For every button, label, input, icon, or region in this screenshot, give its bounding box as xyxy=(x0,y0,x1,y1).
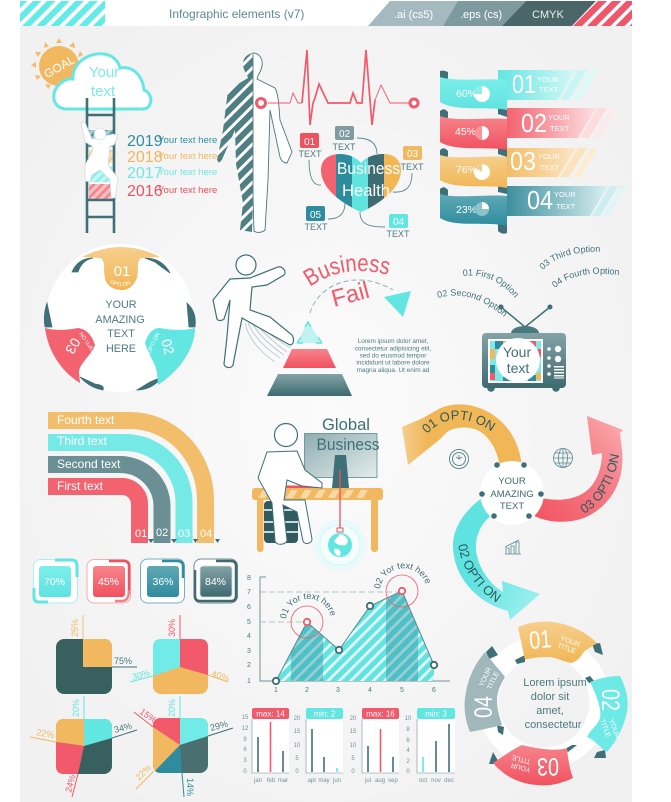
chart oct-dec: 8 xyxy=(406,727,410,733)
ribbon 03 xyxy=(440,146,598,194)
goal cloud and ladder xyxy=(31,38,217,233)
curved callouts: 02 Yor text here xyxy=(374,563,430,588)
ribbon 04: 23% xyxy=(456,204,477,216)
line xyxy=(276,591,434,681)
lorem text: Lorem ipsum dolor amet, xyxy=(358,338,429,345)
timeline years: 2016 xyxy=(127,183,163,200)
chart jul-sep xyxy=(350,708,399,784)
cyan arrow xyxy=(453,499,540,620)
area xyxy=(276,591,434,681)
tile 70: 70% xyxy=(44,576,65,588)
segment 01 orange: 01 xyxy=(114,263,130,280)
segment 01 orange: OPTI ON xyxy=(110,280,130,286)
label 01 xyxy=(298,133,322,159)
segment 04 xyxy=(465,652,505,732)
option labels xyxy=(437,245,619,317)
lorem text: consectetur adipisicing elit, xyxy=(355,346,431,352)
band labels: 02 xyxy=(156,527,168,539)
chart oct-dec: min: 3 xyxy=(425,710,447,718)
chart jul-sep: 15 xyxy=(350,729,357,735)
center text: TEXT xyxy=(107,328,135,340)
header bar xyxy=(20,1,632,26)
chart jul-sep: 5 xyxy=(351,756,355,762)
axis labels: 8 xyxy=(247,575,251,582)
ribbon 03: 76% xyxy=(456,164,477,176)
line chart xyxy=(247,563,450,694)
chart oct-dec: 0 xyxy=(406,769,410,775)
ribbon 02: YOUR xyxy=(548,113,570,122)
header red stripes xyxy=(572,1,632,26)
band first xyxy=(48,486,140,543)
band labels: 03 xyxy=(178,528,190,540)
square pie 1 xyxy=(56,615,137,694)
dashed trajectory xyxy=(310,280,393,313)
white disc xyxy=(46,244,194,392)
timeline years: Your text here xyxy=(158,185,217,196)
tile 36 xyxy=(140,559,184,603)
segment 03: YOUR xyxy=(510,761,532,773)
tv body: text xyxy=(507,360,529,376)
timeline years: 2019 xyxy=(127,133,163,150)
label 05 xyxy=(304,206,328,232)
ribbon 02 xyxy=(440,108,617,157)
segment 02 cyan xyxy=(145,328,195,385)
band labels xyxy=(57,413,212,540)
tile 45 xyxy=(87,560,130,603)
tab: eps: .eps (cs) xyxy=(460,9,502,21)
globe xyxy=(314,470,366,571)
segment 03 red xyxy=(45,328,97,383)
center text: consectetur xyxy=(525,719,582,731)
segment 01 orange xyxy=(82,247,160,290)
human body left striped xyxy=(217,53,253,232)
ribbon 01: TEXT xyxy=(539,85,559,94)
band labels: First text xyxy=(57,479,104,493)
chart jul-sep: sep xyxy=(388,778,398,784)
chart jul-sep: 0 xyxy=(351,769,355,775)
axis labels: 1 xyxy=(274,687,278,694)
icon: cloud: text xyxy=(91,83,116,100)
ring diagram xyxy=(465,622,628,785)
label 05: 05 xyxy=(310,210,321,221)
curved callouts xyxy=(280,563,430,618)
desk xyxy=(252,486,383,552)
band labels: 01 xyxy=(135,528,147,540)
segment 01: 01 xyxy=(528,625,552,655)
chart jan-mar: mar xyxy=(278,778,288,784)
three arrows xyxy=(402,404,623,620)
chart oct-dec: 10 xyxy=(405,716,412,722)
chart jul-sep: max: 16 xyxy=(366,710,395,718)
business fail xyxy=(212,254,431,396)
segment 03 red: 03 xyxy=(62,335,84,357)
pie squares xyxy=(30,615,233,797)
axis labels: 5 xyxy=(247,619,251,626)
chart apr-jun: 10 xyxy=(294,743,301,749)
square pie 3 xyxy=(30,696,137,797)
business fail text xyxy=(302,255,390,313)
band labels: Second text xyxy=(57,457,121,471)
tv body xyxy=(482,326,566,392)
center circle: TEXT xyxy=(500,501,524,512)
business fail text: Business xyxy=(302,255,390,286)
segment 02 cyan: OPTI ON xyxy=(146,332,161,355)
tile 84 xyxy=(194,559,238,603)
ribbon 04 xyxy=(440,185,627,234)
icon: sun goal: GOAL xyxy=(42,52,78,81)
chart jan-mar: 3 xyxy=(243,758,247,764)
peak points xyxy=(304,588,405,625)
label 02: 02 xyxy=(339,129,350,140)
icon: clock xyxy=(450,450,468,468)
square pie 2 xyxy=(130,615,231,694)
timeline years: Your text here xyxy=(158,135,217,146)
tab: cmyk xyxy=(502,1,596,26)
label 01: TEXT xyxy=(298,149,322,159)
chart jan-mar: 15 xyxy=(242,715,249,721)
axis labels: 5 xyxy=(400,687,404,694)
ribbon 03: TEXT xyxy=(540,163,560,172)
center text: amet, xyxy=(536,705,564,717)
axis labels: 2 xyxy=(305,687,309,694)
segment 03 red: OPTI ON xyxy=(79,330,97,352)
global business heading: Business xyxy=(316,435,380,454)
chart apr-jun: 0 xyxy=(295,769,299,775)
center circle: YOUR xyxy=(498,476,526,487)
segment 02: TITLE xyxy=(598,718,611,739)
band second xyxy=(48,464,162,543)
segment 02: YOUR xyxy=(607,718,621,740)
square pie 4: 15% xyxy=(138,706,158,725)
segment 01 xyxy=(518,622,597,663)
timeline years: 2018 xyxy=(127,149,163,166)
desk scene xyxy=(252,415,383,571)
axis labels: 2 xyxy=(247,662,251,669)
chart oct-dec: nov xyxy=(431,778,441,784)
option labels: 03 Third Option xyxy=(540,245,600,269)
tile 70 xyxy=(34,560,78,603)
white ring xyxy=(488,646,600,758)
ribbon 03: YOUR xyxy=(538,152,560,161)
timeline years: Your text here xyxy=(158,151,217,162)
band fourth xyxy=(48,420,206,543)
label 02: TEXT xyxy=(332,142,356,152)
heart chart xyxy=(321,154,401,212)
chart jul-sep: 10 xyxy=(350,743,357,749)
curved callouts: 01 Yor text here xyxy=(280,593,335,618)
square pie 4: 29% xyxy=(209,719,229,733)
ribbon 02: 02 xyxy=(521,108,547,138)
heart chart: Health xyxy=(342,181,390,200)
square pie 4 xyxy=(133,696,233,797)
axis labels: 6 xyxy=(432,687,436,694)
tab: cmyk: CMYK xyxy=(532,9,564,21)
chart apr-jun: 5 xyxy=(295,756,299,762)
guide lines xyxy=(260,592,402,622)
label 01: 01 xyxy=(304,137,315,148)
chart oct-dec: 2 xyxy=(406,759,410,765)
icon: globe grid xyxy=(554,448,572,468)
center text: HERE xyxy=(106,343,136,355)
puzzle circle xyxy=(44,244,196,392)
chart jan-mar: jan xyxy=(253,778,262,784)
timeline years: Your text here xyxy=(158,167,217,178)
square pie 2: 30% xyxy=(131,668,151,682)
center text: YOUR xyxy=(105,299,137,311)
monitor xyxy=(304,434,377,488)
label 02 xyxy=(332,126,356,152)
kicking person xyxy=(213,255,293,368)
ribbon 01: 01 xyxy=(512,69,536,99)
red arrow: 03 OPTI ON xyxy=(580,454,619,513)
label 03: TEXT xyxy=(400,162,424,172)
icon: cloud xyxy=(54,54,151,109)
tab: ai: .ai (cs5) xyxy=(394,9,433,21)
square pie 2: 30% xyxy=(167,619,177,637)
chart jul-sep: aug xyxy=(375,778,385,784)
lorem text: sed do eiusmod tempor xyxy=(360,352,427,360)
square pie 2: 40% xyxy=(210,668,231,683)
heartbeat line xyxy=(256,50,418,125)
pyramid xyxy=(267,322,352,396)
segment 01: TITLE xyxy=(556,642,577,656)
label 04: TEXT xyxy=(386,229,410,239)
segment 02: 02 xyxy=(596,689,624,711)
axis labels: 4 xyxy=(247,633,251,640)
chart oct-dec: 4 xyxy=(406,748,410,754)
option labels: 01 First Option xyxy=(463,269,518,298)
header cyan stripes xyxy=(20,1,105,26)
chart oct-dec: dec xyxy=(444,778,454,784)
antennas xyxy=(499,305,552,327)
chart apr-jun: apr xyxy=(308,778,316,784)
square pie 3: 34% xyxy=(113,721,133,735)
ribbon 04: 04 xyxy=(527,185,553,215)
center circle: AMAZING xyxy=(490,489,534,500)
timeline years: 2017 xyxy=(127,165,163,182)
chart apr-jun: jun xyxy=(332,778,341,784)
icon: climber xyxy=(81,122,118,198)
highlight bands xyxy=(291,622,323,681)
chart jan-mar: 9 xyxy=(243,737,247,743)
points xyxy=(273,603,437,684)
label 05: TEXT xyxy=(304,222,328,232)
human body right outline xyxy=(253,53,292,232)
tile 36: 36% xyxy=(152,576,174,588)
red arrow xyxy=(534,416,623,522)
chart jan-mar xyxy=(242,708,289,784)
segment 02 xyxy=(587,676,628,752)
option labels: 02 Second Option xyxy=(437,289,506,317)
connectors xyxy=(309,138,412,227)
chart apr-jun: min: 2 xyxy=(314,710,336,718)
square pie 3: 20% xyxy=(71,699,81,717)
icon: cloud: Your xyxy=(89,64,119,81)
label 03 xyxy=(400,146,424,172)
business health figure xyxy=(217,50,424,239)
chart apr-jun: 15 xyxy=(294,729,301,735)
ribbon 01 xyxy=(440,69,598,117)
axes xyxy=(260,577,450,681)
orange arrow xyxy=(402,404,522,465)
ribbon 04: TEXT xyxy=(556,202,576,211)
chart apr-jun: may xyxy=(318,778,330,784)
band tips xyxy=(148,539,220,543)
square pie 3: 24% xyxy=(63,774,78,794)
square pie 1: 75% xyxy=(114,656,132,666)
segment 04: 04 xyxy=(470,696,498,718)
label 04 xyxy=(386,214,410,239)
heart chart: Business xyxy=(337,159,400,178)
ribbon 01: 60% xyxy=(456,88,477,100)
tv xyxy=(437,245,619,392)
square pie 4: 20% xyxy=(167,699,177,717)
chair xyxy=(264,501,298,543)
tv body: Your xyxy=(503,344,531,360)
tab: ai xyxy=(368,1,460,26)
segment 03: 03 xyxy=(537,752,559,780)
segment 02 cyan: 02 xyxy=(158,337,178,357)
option labels: 04 Fourth Option xyxy=(552,268,619,287)
icon: sun goal xyxy=(31,38,83,89)
falling triangle xyxy=(384,291,411,317)
square pie 1: 25% xyxy=(70,619,80,637)
chart oct-dec: oct xyxy=(419,778,427,784)
axis labels: 6 xyxy=(247,604,251,611)
band third xyxy=(48,442,184,543)
label 03: 03 xyxy=(407,149,418,160)
band labels: 04 xyxy=(200,528,212,540)
square pie 4: 22% xyxy=(133,763,153,782)
axis labels: 4 xyxy=(368,687,372,694)
segment 01: YOUR xyxy=(559,635,581,649)
segment 04: TITLE xyxy=(486,670,501,691)
tab: eps xyxy=(443,1,526,26)
chart apr-jun xyxy=(294,708,343,784)
chart oct-dec: 6 xyxy=(406,738,410,744)
segment 04: YOUR xyxy=(478,667,493,688)
cyan arrow: 02 OPTI ON xyxy=(458,544,501,602)
ribbon 02: TEXT xyxy=(550,124,570,133)
band labels: Third text xyxy=(57,434,108,448)
bar charts xyxy=(242,708,455,784)
dark folds xyxy=(44,258,195,390)
square pie 3: 22% xyxy=(36,727,55,740)
center circle xyxy=(479,461,544,525)
lorem text: magna aliqua. Ut enim ad xyxy=(357,367,430,374)
chart jan-mar: 6 xyxy=(243,747,247,753)
icon: ladder xyxy=(87,98,114,233)
chart jan-mar: 0 xyxy=(243,769,247,775)
tile 45: 45% xyxy=(98,576,119,588)
center text: AMAZING xyxy=(95,314,145,326)
axis labels: 1 xyxy=(247,678,251,685)
chart jan-mar: feb xyxy=(267,778,276,784)
global business heading: Global xyxy=(322,415,370,434)
center text: dolor sit xyxy=(531,691,569,703)
percentage tiles xyxy=(34,559,238,603)
header title: Infographic elements (v7) xyxy=(169,7,304,21)
business fail text: Fail xyxy=(329,277,372,313)
ribbon 04: YOUR xyxy=(554,190,576,199)
axis labels: 7 xyxy=(247,589,251,596)
band labels: Fourth text xyxy=(57,413,115,427)
orange arrow: 01 OPTI ON xyxy=(422,410,496,432)
tile 84: 84% xyxy=(205,576,226,588)
center text: Lorem ipsum xyxy=(523,677,587,689)
chart jul-sep: jul xyxy=(364,778,371,784)
timeline years xyxy=(127,133,217,200)
chart jan-mar: 12 xyxy=(242,726,249,732)
ring folds xyxy=(486,643,606,764)
ribbon 01: YOUR xyxy=(537,75,559,84)
highlight band 2 xyxy=(386,591,418,681)
chart apr-jun: 20 xyxy=(294,716,301,722)
icon: bar growth xyxy=(505,540,521,554)
seated person xyxy=(258,424,322,544)
axis labels: 3 xyxy=(336,687,340,694)
label 04: 04 xyxy=(393,217,404,228)
chart oct-dec xyxy=(405,708,455,784)
segment 03: TITLE xyxy=(511,753,532,765)
ribbon list xyxy=(440,69,627,234)
chart jul-sep: 20 xyxy=(350,716,357,722)
global business heading xyxy=(316,415,380,454)
ribbon 03: 03 xyxy=(510,146,536,176)
axis labels: 3 xyxy=(247,648,251,655)
axis labels xyxy=(247,575,436,694)
chart jan-mar: max: 14 xyxy=(256,710,285,718)
square pie 4: 14% xyxy=(185,778,195,796)
lorem text: incididunt ut labore dolore xyxy=(356,360,430,366)
highlight circles xyxy=(291,575,418,638)
rainbow bands xyxy=(48,413,220,543)
ribbon 02: 45% xyxy=(455,126,476,138)
segment 03 xyxy=(493,745,573,785)
